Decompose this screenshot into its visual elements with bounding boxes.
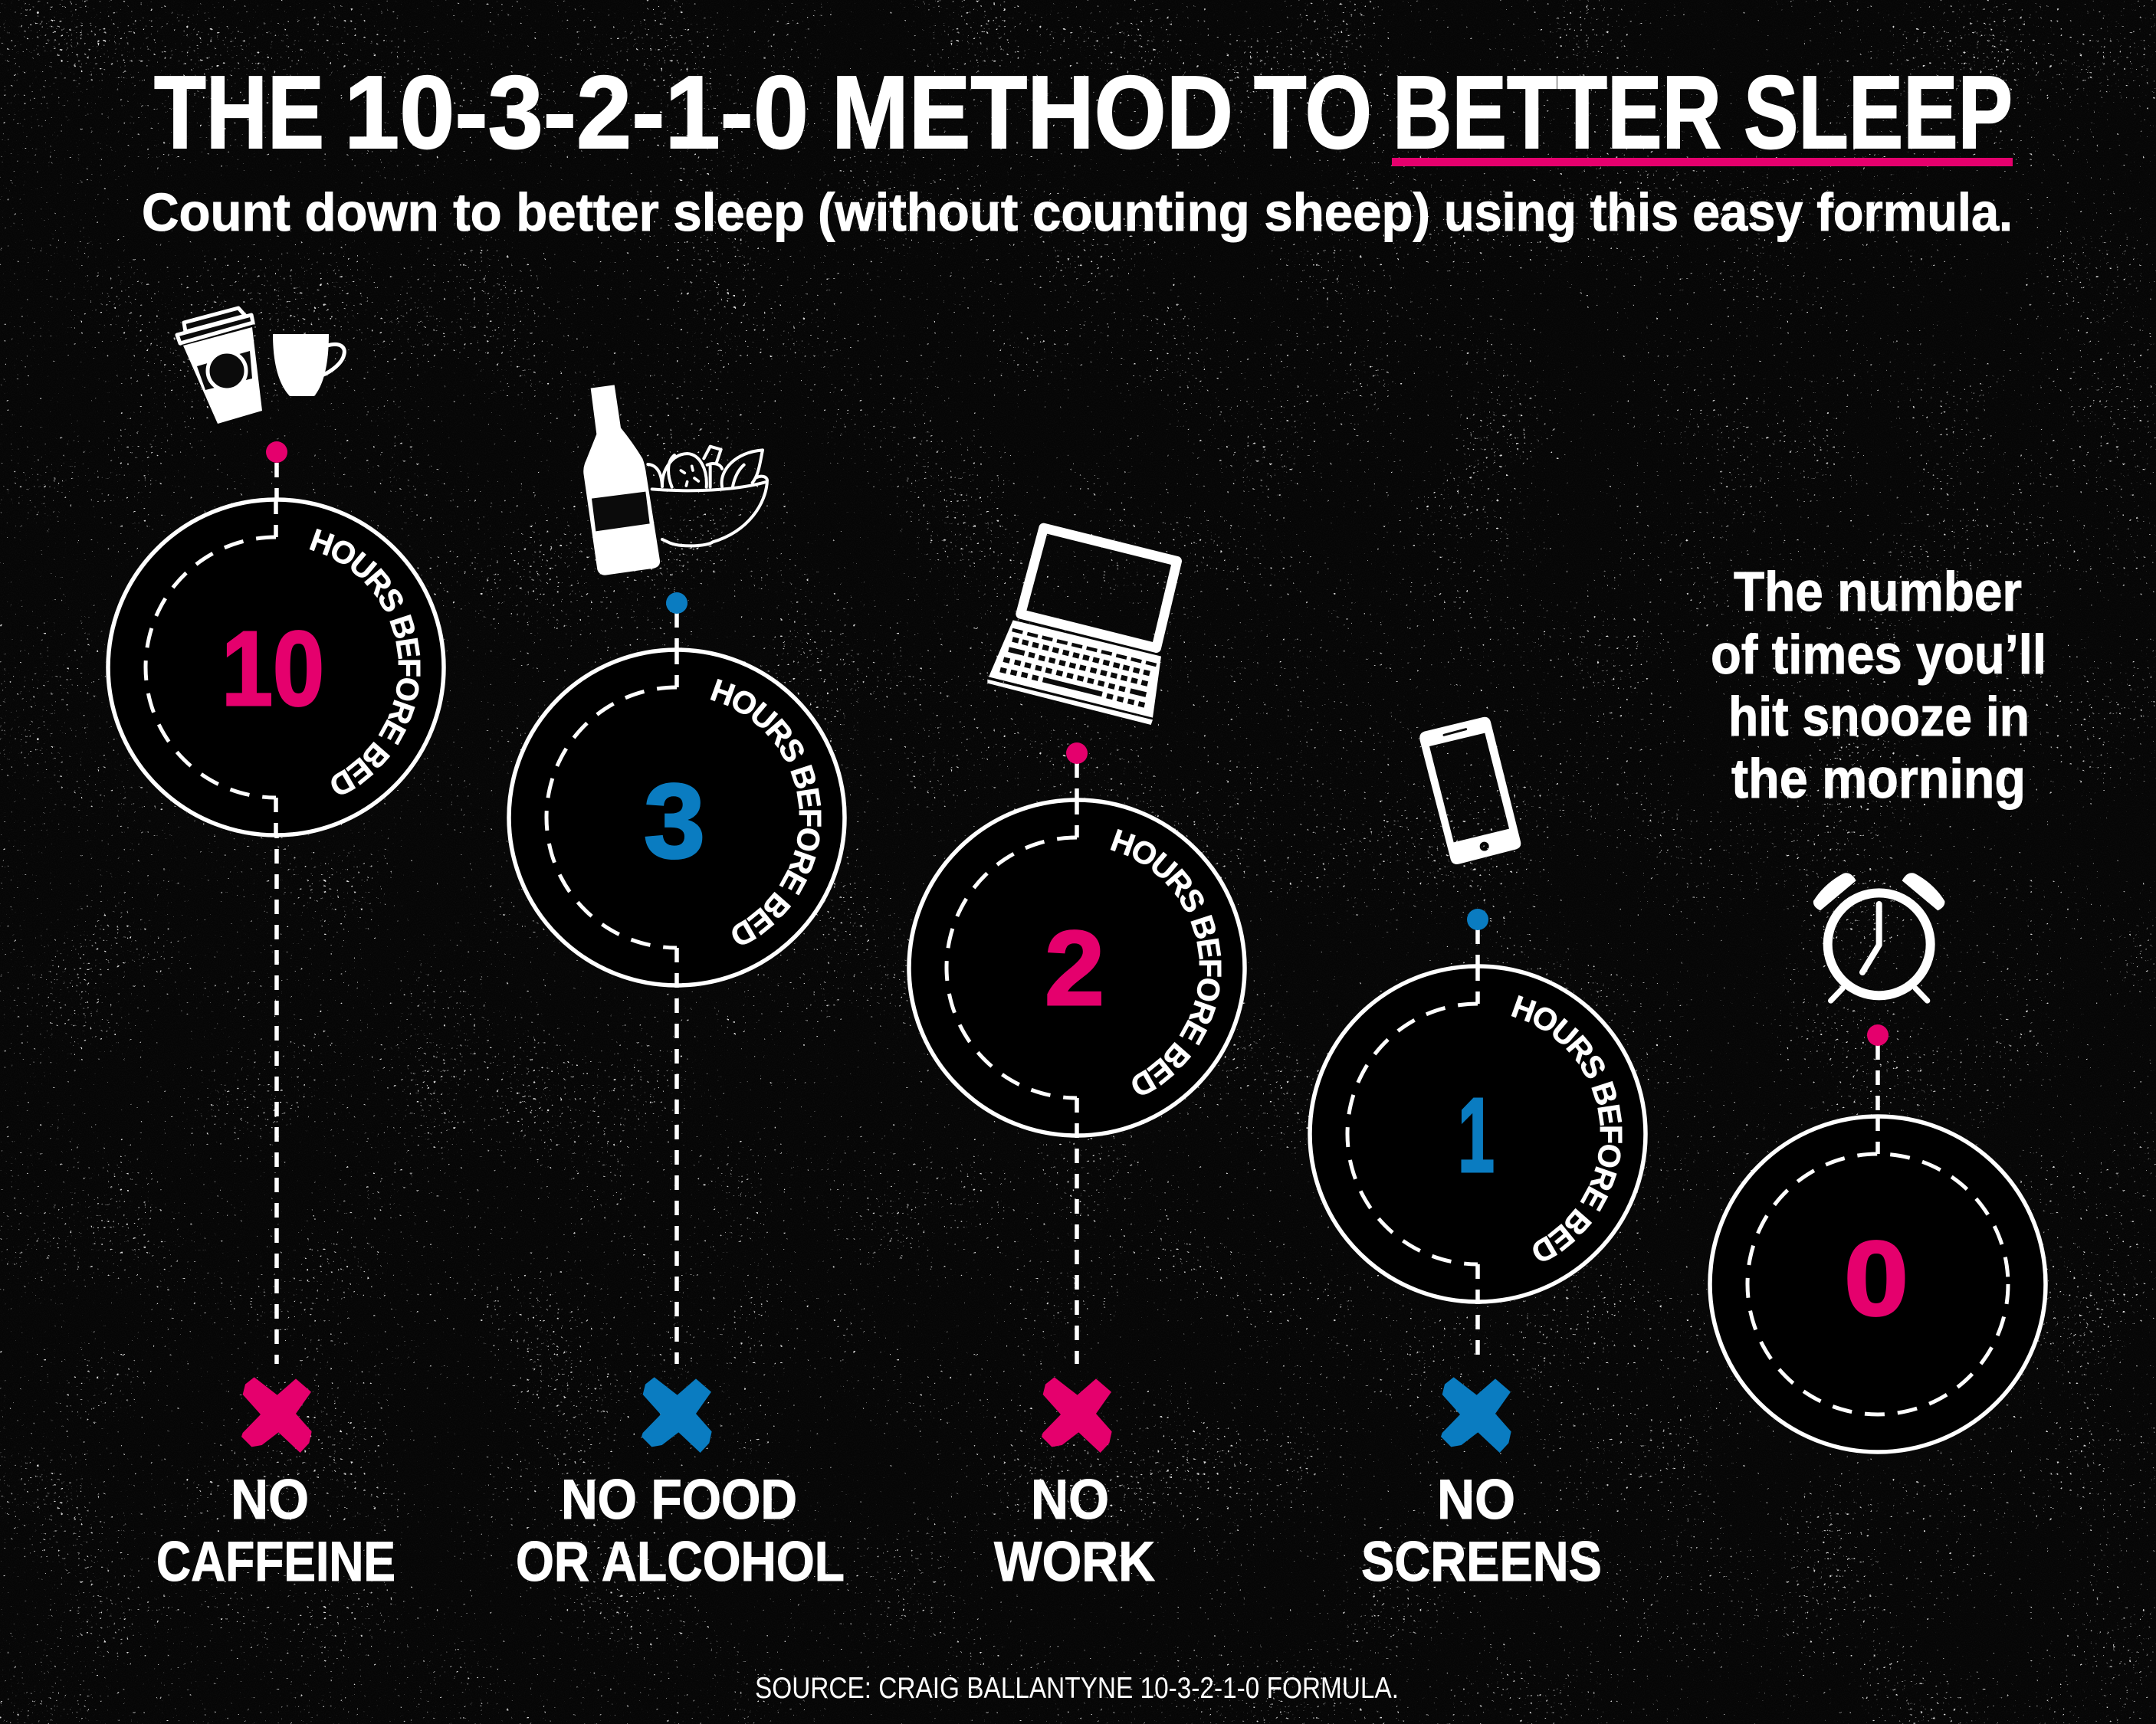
dial: 2 hours before bed: HOURS BEFORE BED bbox=[1110, 829, 1222, 1095]
dial: 2 hours before bed bbox=[907, 798, 1247, 1138]
label: no screens bbox=[1361, 1469, 1602, 1593]
label: no work: WORK bbox=[994, 1531, 1155, 1593]
text: number of snoozes: The number bbox=[1734, 562, 2022, 623]
x mark bbox=[1042, 1377, 1112, 1453]
label: no caffeine: NO bbox=[231, 1469, 309, 1531]
dial: 0 bbox=[1710, 1116, 2046, 1452]
title: THE bbox=[154, 54, 324, 170]
text: number of snoozes: of times you’ll bbox=[1711, 624, 2046, 686]
title: BETTER bbox=[1393, 54, 1721, 170]
subtitle: Count down to better sleep bbox=[142, 182, 805, 242]
dial: 3 hours before bed bbox=[507, 647, 847, 988]
icon: coffee cups bbox=[177, 308, 344, 424]
label: no caffeine: CAFFEINE bbox=[156, 1531, 395, 1593]
icon: smartphone bbox=[1419, 717, 1521, 864]
label: no food or alcohol: OR ALCOHOL bbox=[516, 1531, 845, 1593]
dial: 3 hours before bed: HOURS BEFORE BED bbox=[710, 679, 822, 945]
marker dot bbox=[266, 441, 287, 463]
label: no screens: NO bbox=[1437, 1469, 1515, 1531]
icon: bottle and salad bowl bbox=[583, 385, 767, 575]
marker dot bbox=[666, 592, 687, 614]
source line: SOURCE: CRAIG BALLANTYNE 10-3-2-1-0 FORMULA. bbox=[755, 1672, 1399, 1705]
connector line bbox=[1075, 763, 1079, 1364]
label: no food or alcohol: NO FOOD bbox=[561, 1469, 797, 1531]
step: 3 hours, no food or alcohol bbox=[507, 385, 847, 1593]
icon: laptop bbox=[987, 528, 1177, 725]
x mark bbox=[642, 1377, 712, 1453]
dial: 10 hours before bed: HOURS BEFORE BED bbox=[310, 529, 420, 795]
dial: 1 hour before bed: 1 bbox=[1458, 1077, 1495, 1195]
title: 10-3-2-1-0 bbox=[344, 54, 809, 170]
icon: alarm clock bbox=[1813, 873, 1944, 1001]
title bbox=[154, 54, 2013, 170]
marker dot bbox=[1467, 909, 1488, 930]
x mark bbox=[241, 1377, 312, 1453]
dial: 2 hours before bed: 2 bbox=[1045, 910, 1104, 1028]
dial: 0: 0 bbox=[1844, 1220, 1908, 1338]
text: number of snoozes: hit snooze in bbox=[1728, 687, 2030, 748]
label: no work bbox=[994, 1469, 1155, 1593]
step: 2 hours, no work bbox=[907, 523, 1247, 1593]
step: 0 snooze bbox=[1710, 562, 2046, 1452]
connector line bbox=[274, 463, 279, 1364]
text: number of snoozes bbox=[1711, 562, 2046, 810]
dial: 1 hour before bed: HOURS BEFORE BED bbox=[1511, 995, 1622, 1261]
subtitle bbox=[142, 182, 2013, 242]
x mark bbox=[1441, 1377, 1511, 1453]
label: no caffeine bbox=[156, 1469, 395, 1593]
title: METHOD bbox=[832, 54, 1233, 170]
dial: 10 hours before bed bbox=[106, 497, 446, 837]
label: no screens: SCREENS bbox=[1361, 1531, 1602, 1593]
step: 1 hour, no screens bbox=[1308, 717, 1648, 1593]
dial: 3 hours before bed: 3 bbox=[644, 762, 705, 880]
label: no work: NO bbox=[1031, 1469, 1109, 1531]
subtitle: (without counting sheep) bbox=[818, 182, 1430, 242]
connector line bbox=[1475, 929, 1480, 1364]
marker dot bbox=[1867, 1024, 1889, 1046]
marker dot bbox=[1066, 742, 1088, 764]
text: number of snoozes: the morning bbox=[1731, 749, 2026, 810]
dial: 1 hour before bed bbox=[1308, 964, 1648, 1304]
title: SLEEP bbox=[1744, 54, 2013, 170]
title: TO bbox=[1254, 54, 1372, 170]
label: no food or alcohol bbox=[516, 1469, 845, 1593]
connector line bbox=[674, 613, 679, 1364]
dial: 10 hours before bed: 10 bbox=[222, 610, 324, 728]
step: 10 hours, no caffeine bbox=[106, 306, 446, 1593]
connector line bbox=[1875, 1045, 1880, 1154]
subtitle: using this easy formula. bbox=[1444, 182, 2013, 242]
